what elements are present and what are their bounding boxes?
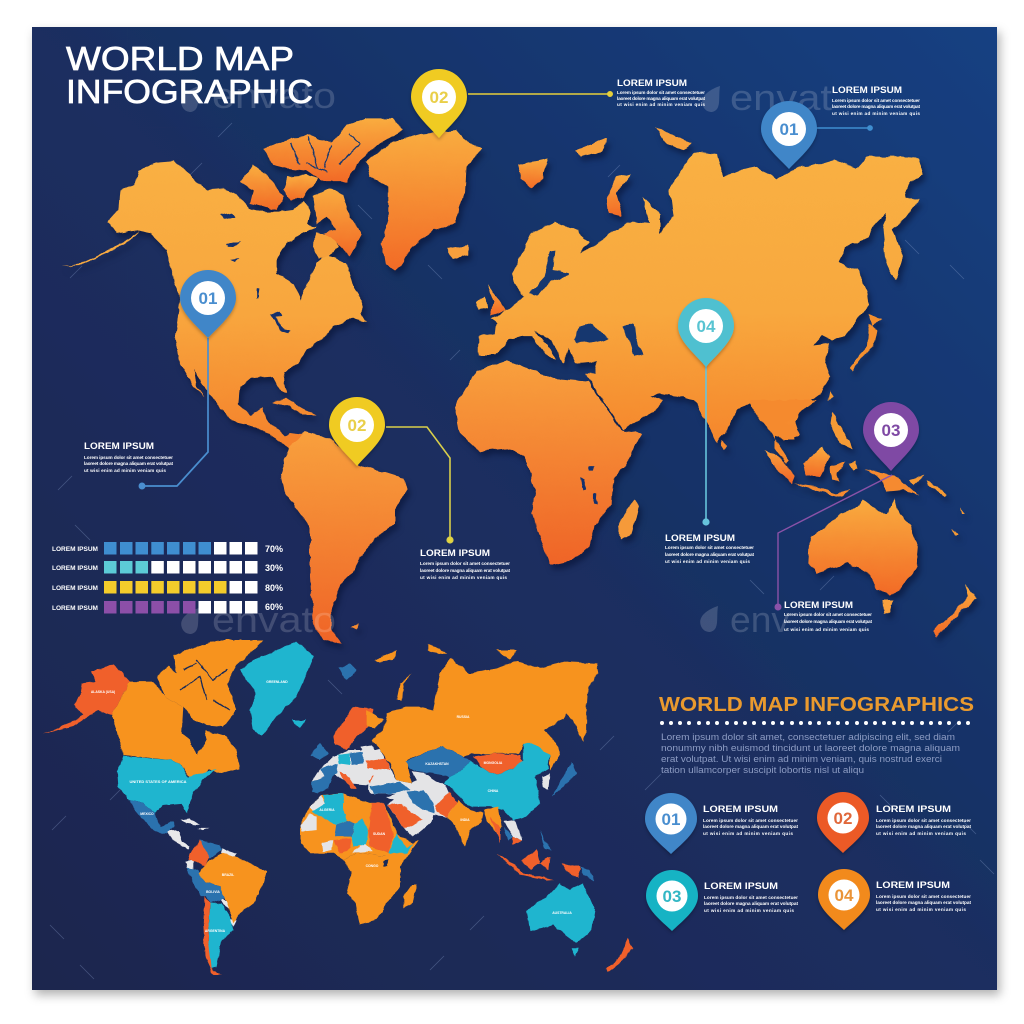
iran [407, 790, 435, 813]
eastern hemisphere labels: INDIA [460, 818, 470, 822]
greenland [367, 130, 482, 272]
australia [527, 883, 595, 943]
americas country labels [91, 680, 288, 933]
chile [203, 897, 222, 975]
colombia [188, 840, 210, 867]
egypt and sudan region [368, 803, 393, 853]
text block: top right 01: laoreet dolore magna aliquam erat volutpat [832, 104, 920, 109]
lower political world map [43, 640, 633, 975]
connector: left 01 [139, 338, 208, 489]
western europe [310, 743, 363, 793]
arctic channels [180, 660, 230, 710]
legend pin 02 [817, 792, 869, 853]
legend text 02: Lorem ipsum dolor sit amet consectetuer [876, 818, 971, 823]
connector: top right 01 [815, 126, 872, 130]
pakistan [435, 792, 457, 817]
heading: world map infographics: WORLD MAP INFOGRAPHICS [659, 693, 974, 716]
central america and caribbean [167, 818, 237, 927]
china [443, 743, 550, 820]
algeria [312, 793, 347, 825]
korea [542, 773, 550, 790]
arabian coast [387, 792, 432, 837]
legend text 02: LOREM IPSUM [876, 804, 951, 815]
russia [372, 658, 598, 783]
americas country labels: MEXICO [140, 812, 154, 816]
row 80%: LOREM IPSUM [52, 585, 98, 592]
papua [580, 867, 595, 882]
eastern hemisphere labels: KAZAKHSTAN [425, 762, 449, 766]
connector: 04 [703, 365, 709, 525]
row 60%: 60% [265, 602, 283, 612]
pin: middle 02 [329, 397, 385, 466]
text block: middle 02: laoreet dolore magna aliquam erat volutpat [420, 568, 510, 573]
watermarks: envato [212, 599, 336, 640]
west africa [300, 817, 333, 853]
nigeria [333, 838, 352, 853]
title: INFOGRAPHIC [66, 73, 313, 110]
kazakhstan [405, 747, 470, 777]
legend text 01: Lorem ipsum dolor sit amet consectetuer [703, 818, 798, 823]
legend text 01: ut wisi enim ad minim veniam quis [703, 831, 793, 836]
row 60%: LOREM IPSUM [52, 605, 98, 612]
text block: 04: laoreet dolore magna aliquam erat volutpat [665, 552, 754, 557]
text block: top 02 [617, 78, 705, 107]
americas country labels: ARGENTINA [205, 929, 226, 933]
title: WORLD MAP [66, 40, 294, 77]
mongolia [473, 753, 523, 775]
title [66, 40, 313, 110]
text block: left 01 [84, 441, 173, 473]
legend pin 01 [645, 793, 697, 854]
legend pin 04: 04 [835, 886, 854, 905]
connector: middle 02 [386, 427, 453, 543]
row 30% [52, 561, 283, 574]
eurasia [475, 127, 923, 450]
text block: 04: ut wisi enim ad minim veniam quis [665, 559, 750, 564]
legend text 03: Lorem ipsum dolor sit amet consectetuer [704, 895, 798, 900]
north america [62, 118, 403, 440]
central and southern africa [343, 840, 418, 925]
pin: 04: 04 [697, 317, 716, 336]
alaska [43, 664, 130, 734]
row 70%: LOREM IPSUM [52, 546, 98, 553]
paragraph: nonummy nibh euismod tincidunt ut laoreet dolore magna aliquam [661, 743, 960, 754]
text block: left 01: Lorem ipsum dolor sit amet consectetuer [84, 455, 173, 460]
legend text 04: LOREM IPSUM [876, 880, 950, 891]
row 80%: 80% [265, 583, 283, 593]
americas country labels: UNITED STATES OF AMERICA [130, 780, 187, 784]
svalbard [338, 663, 357, 680]
indonesia [497, 850, 580, 881]
watermarks: envat [730, 77, 832, 118]
americas country labels: BOLIVIA [206, 890, 220, 894]
text block: 03 [784, 600, 872, 632]
text block: top 02: ut wisi enim ad minim veniam quis [617, 102, 705, 107]
row 30%: 30% [265, 563, 283, 573]
eastern hemisphere labels: ALGERIA [319, 808, 335, 812]
paragraph: Lorem ipsum dolor sit amet, consectetuer adipiscing elit, sed diam [661, 732, 955, 743]
philippines [540, 830, 552, 850]
eastern hemisphere labels [319, 715, 572, 915]
pin: 03: 03 [882, 421, 900, 440]
venezuela, peru, bolivia [187, 840, 227, 903]
legend pin 02: 02 [834, 809, 852, 828]
southeast asia islands [750, 400, 965, 535]
main world map [62, 118, 977, 643]
text block: top right 01: ut wisi enim ad minim veniam quis [832, 111, 920, 116]
iceland [292, 720, 307, 728]
libya [343, 800, 370, 822]
row 70%: 70% [265, 544, 283, 554]
watermarks [181, 75, 832, 640]
legend text 03: ut wisi enim ad minim veniam quis [704, 908, 794, 913]
africa [455, 360, 642, 565]
text block: left 01: laoreet dolore magna aliquam erat volutpat [84, 461, 173, 466]
legend text 02: laoreet dolore magna aliquam erat volutpat [876, 824, 971, 829]
scandinavia [333, 707, 373, 750]
text block: top right 01: Lorem ipsum dolor sit amet consectetuer [832, 98, 920, 103]
tasmania [572, 948, 579, 957]
legend text 01: laoreet dolore magna aliquam erat volutpat [703, 824, 798, 829]
niger [335, 820, 355, 837]
lower map: americas [43, 640, 313, 975]
americas country labels: ALASKA (USA) [91, 690, 115, 694]
legend pin 01: 01 [662, 810, 680, 829]
text block: 04: Lorem ipsum dolor sit amet consectetuer [665, 545, 754, 550]
americas country labels: BRAZIL [222, 873, 234, 877]
text block: middle 02: LOREM IPSUM [420, 548, 490, 559]
central asia [412, 772, 448, 805]
pin: middle 02: 02 [348, 416, 366, 435]
paragraph: tation ullamcorper suscipit lobortis nisl ut aliqu [661, 765, 864, 776]
ethiopia [388, 833, 413, 853]
text block: 03: laoreet dolore magna aliquam erat volutpat [784, 619, 872, 624]
canada [112, 640, 263, 777]
legend pin 03: 03 [663, 887, 681, 906]
text block: 03: ut wisi enim ad minim veniam quis [784, 627, 869, 632]
pin: 04 [678, 298, 734, 367]
legend text 03 [704, 881, 798, 913]
saudi arabia [388, 803, 423, 828]
pin: top 02 [411, 69, 467, 138]
legend text 03: laoreet dolore magna aliquam erat volutpat [704, 901, 798, 906]
legend text 03: LOREM IPSUM [704, 881, 778, 892]
pin: left 01 [180, 270, 236, 338]
text block: middle 02: ut wisi enim ad minim veniam quis [420, 575, 507, 580]
finland [367, 710, 383, 728]
mexico [130, 800, 175, 833]
legend text 01: LOREM IPSUM [703, 804, 778, 815]
americas country labels: GREENLAND [266, 680, 288, 684]
chad [352, 818, 368, 847]
africa lake [383, 860, 388, 867]
pin: top right 01 [761, 101, 817, 169]
pin: top 02: 02 [430, 88, 448, 107]
watermarks: envato [212, 75, 336, 116]
australia [808, 498, 977, 637]
usa [117, 756, 217, 813]
central america link [277, 433, 305, 450]
pin: 03 [863, 402, 919, 471]
paragraph: erat volutpat. Ut wisi enim ad minim veniam, quis nostrud exerci [661, 754, 942, 765]
legend text 02: ut wisi enim ad minim veniam quis [876, 831, 966, 836]
new zealand [607, 938, 633, 972]
legend text 04: Lorem ipsum dolor sit amet consectetuer [876, 894, 971, 899]
paragraph [661, 732, 960, 776]
japan [552, 762, 577, 797]
text block: left 01: LOREM IPSUM [84, 441, 154, 452]
eastern hemisphere labels: AUSTRALIA [552, 911, 572, 915]
text block: 04 [665, 533, 754, 564]
legend text 01 [703, 804, 798, 836]
greenland [240, 642, 313, 737]
eastern europe [338, 758, 390, 788]
text block: top 02: laoreet dolore magna aliquam erat volutpat [617, 96, 705, 101]
legend pin 04 [818, 869, 870, 930]
legend pin 03 [646, 870, 698, 931]
row 80% [52, 581, 283, 594]
arctic islands [375, 643, 517, 700]
pin: top right 01: 01 [780, 120, 798, 139]
text block: left 01: ut wisi enim ad minim veniam quis [84, 468, 166, 473]
argentina [208, 903, 233, 968]
legend text 02 [876, 804, 971, 836]
text block: 03: Lorem ipsum dolor sit amet consectetuer [784, 612, 872, 617]
text block: middle 02: Lorem ipsum dolor sit amet consectetuer [420, 561, 510, 566]
eastern hemisphere labels: CONGO [366, 864, 379, 868]
watermarks: env [730, 599, 790, 640]
row 60% [52, 601, 283, 614]
madagascar [403, 885, 417, 908]
connector: top 02 [468, 92, 612, 96]
text block: top right 01 [832, 85, 920, 116]
southeast asia mainland [483, 807, 522, 845]
text block: top 02: Lorem ipsum dolor sit amet consectetuer [617, 90, 705, 95]
germany [337, 753, 350, 765]
india [447, 800, 483, 847]
legend text 04 [876, 880, 971, 912]
eastern hemisphere labels: RUSSIA [457, 715, 470, 719]
legend text 04: laoreet dolore magna aliquam erat volutpat [876, 900, 971, 905]
connector: 03 [775, 475, 892, 610]
text block: middle 02 [420, 548, 510, 580]
legend text 04: ut wisi enim ad minim veniam quis [876, 907, 966, 912]
turkey [370, 782, 410, 793]
text block: 03: LOREM IPSUM [784, 600, 853, 611]
row 30%: LOREM IPSUM [52, 565, 98, 572]
hudson bay [182, 720, 207, 755]
pin: left 01: 01 [199, 289, 217, 308]
africa base [300, 793, 413, 860]
eastern hemisphere labels: CHINA [488, 789, 499, 793]
europe and middle east base [312, 750, 455, 837]
text block: top 02: LOREM IPSUM [617, 78, 687, 89]
bar chart: square rating rows [52, 542, 283, 614]
brazil [198, 853, 267, 923]
row 70% [52, 542, 283, 554]
text block: 04: LOREM IPSUM [665, 533, 735, 544]
lower map: europe, africa, asia, oceania [300, 643, 633, 972]
eastern hemisphere labels: MONGOLIA [484, 761, 503, 765]
south america [280, 432, 407, 643]
dotted divider [660, 721, 970, 725]
eastern hemisphere labels: SUDAN [373, 832, 386, 836]
text block: top right 01: LOREM IPSUM [832, 85, 902, 96]
